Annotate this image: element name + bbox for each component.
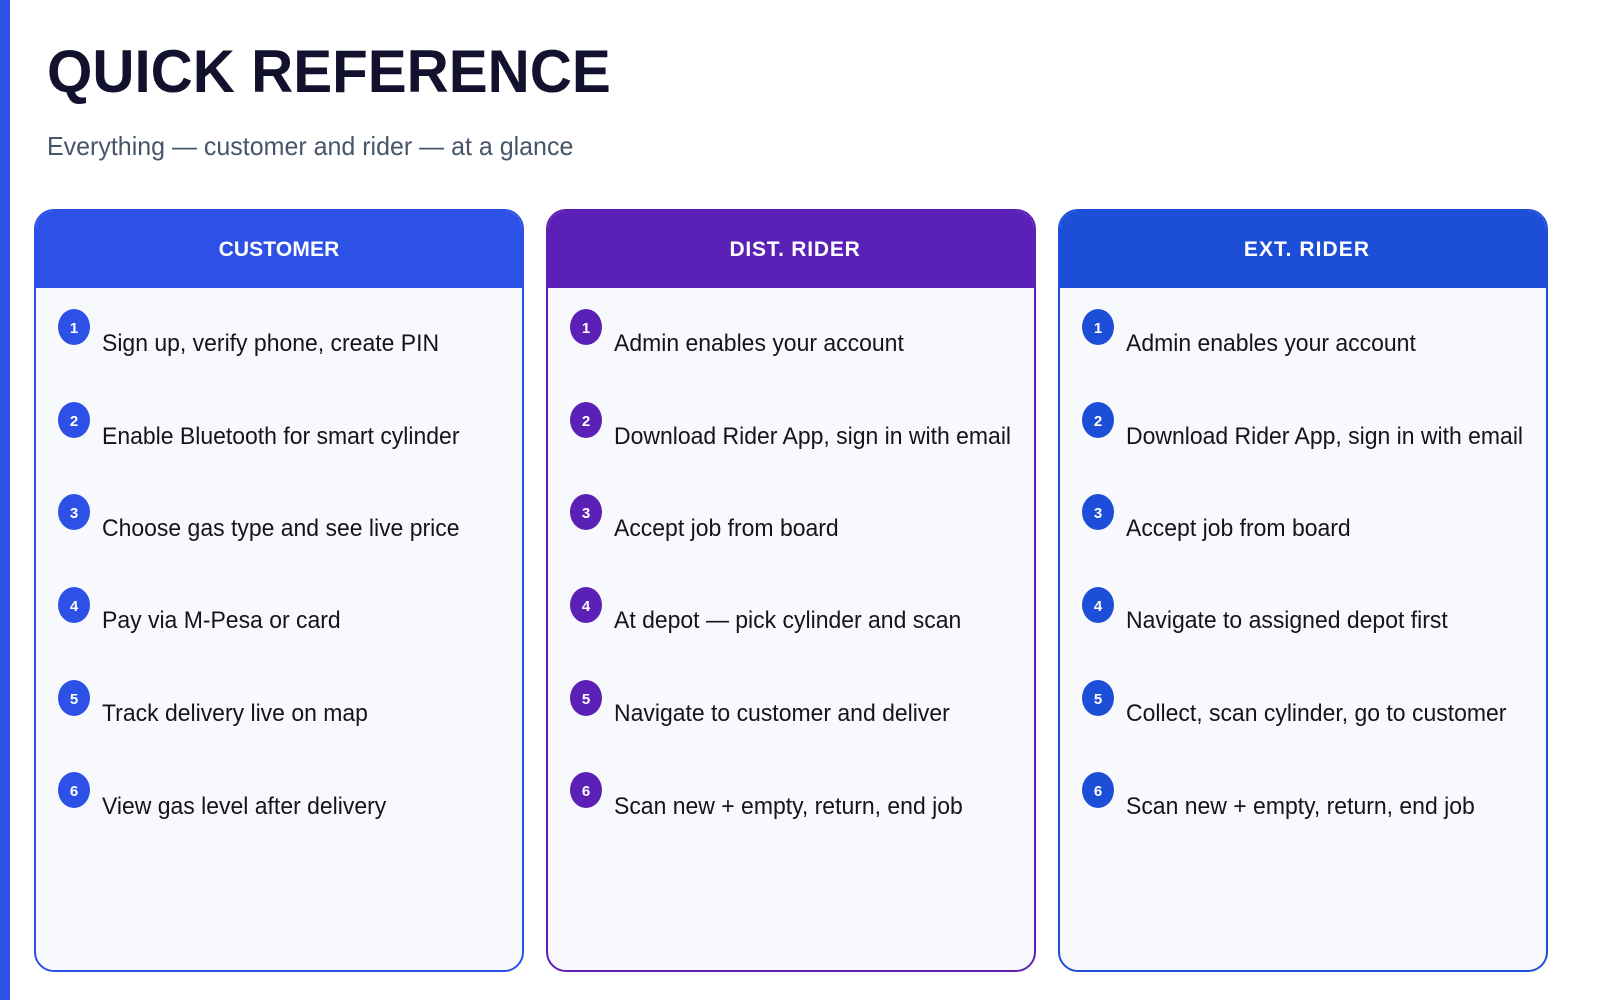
- step 1: [58, 309, 439, 357]
- step 2: 2: [1094, 413, 1102, 430]
- heading: dist. rider: DIST. RIDER: [729, 238, 861, 261]
- heading: ext. rider: EXT. RIDER: [1244, 238, 1370, 261]
- step 4: [58, 587, 341, 634]
- step 1: [1082, 309, 1416, 357]
- title: QUICK REFERENCE: [47, 38, 611, 105]
- step 6: 6: [1094, 783, 1102, 800]
- step 5: [58, 680, 368, 727]
- step 2: Enable Bluetooth for smart cylinder: [102, 423, 459, 450]
- step 5: Collect, scan cylinder, go to customer: [1126, 700, 1506, 727]
- step 5: Navigate to customer and deliver: [614, 700, 950, 727]
- step 1: 1: [70, 320, 78, 337]
- step 6: [1082, 772, 1475, 820]
- step 6: 6: [582, 783, 590, 800]
- accent bar: [0, 0, 10, 1000]
- step 2: [58, 402, 460, 450]
- step 6: 6: [70, 783, 78, 800]
- heading: dist. rider: [546, 209, 1036, 288]
- step 6: Scan new + empty, return, end job: [1126, 793, 1475, 820]
- step 3: [570, 494, 839, 542]
- step 6: [570, 772, 963, 820]
- step 5: 5: [582, 691, 590, 708]
- step 2: Download Rider App, sign in with email: [1126, 423, 1523, 450]
- step 6: Scan new + empty, return, end job: [614, 793, 963, 820]
- step 1: Admin enables your account: [614, 330, 904, 357]
- subtitle: Everything — customer and rider — at a glance: [47, 131, 573, 161]
- step 5: [1082, 680, 1506, 727]
- step 3: Choose gas type and see live price: [102, 515, 459, 542]
- step 3: [1082, 494, 1351, 542]
- step 3: Accept job from board: [1126, 515, 1351, 542]
- panel: ext. rider: [1058, 209, 1548, 972]
- step 1: Admin enables your account: [1126, 330, 1416, 357]
- step 3: 3: [1094, 505, 1102, 522]
- step 1: Sign up, verify phone, create PIN: [102, 330, 439, 357]
- step 1: [570, 309, 904, 357]
- step 5: Track delivery live on map: [102, 700, 368, 727]
- step 4: 4: [582, 598, 590, 615]
- step 2: Download Rider App, sign in with email: [614, 423, 1011, 450]
- step 3: 3: [582, 505, 590, 522]
- step 6: View gas level after delivery: [102, 793, 386, 820]
- panel: customer: [34, 209, 524, 972]
- step 2: 2: [70, 413, 78, 430]
- heading: customer: [34, 209, 524, 288]
- step 6: [58, 772, 386, 820]
- heading: ext. rider: [1058, 209, 1548, 288]
- step 4: 4: [70, 598, 78, 615]
- step 5: [570, 680, 950, 727]
- step 3: Accept job from board: [614, 515, 839, 542]
- step 5: 5: [1094, 691, 1102, 708]
- step 2: 2: [582, 413, 590, 430]
- step 5: 5: [70, 691, 78, 708]
- step 1: 1: [582, 320, 590, 337]
- panel: dist. rider: [546, 209, 1036, 972]
- step 4: 4: [1094, 598, 1102, 615]
- step 4: At depot — pick cylinder and scan: [614, 607, 961, 634]
- step 4: [1082, 587, 1448, 634]
- step 1: 1: [1094, 320, 1102, 337]
- step 2: [570, 402, 1011, 450]
- step 4: Pay via M-Pesa or card: [102, 607, 341, 634]
- step 4: [570, 587, 961, 634]
- heading: customer: CUSTOMER: [219, 238, 339, 261]
- step 3: 3: [70, 505, 78, 522]
- step 4: Navigate to assigned depot first: [1126, 607, 1448, 634]
- step 3: [58, 494, 459, 542]
- step 2: [1082, 402, 1523, 450]
